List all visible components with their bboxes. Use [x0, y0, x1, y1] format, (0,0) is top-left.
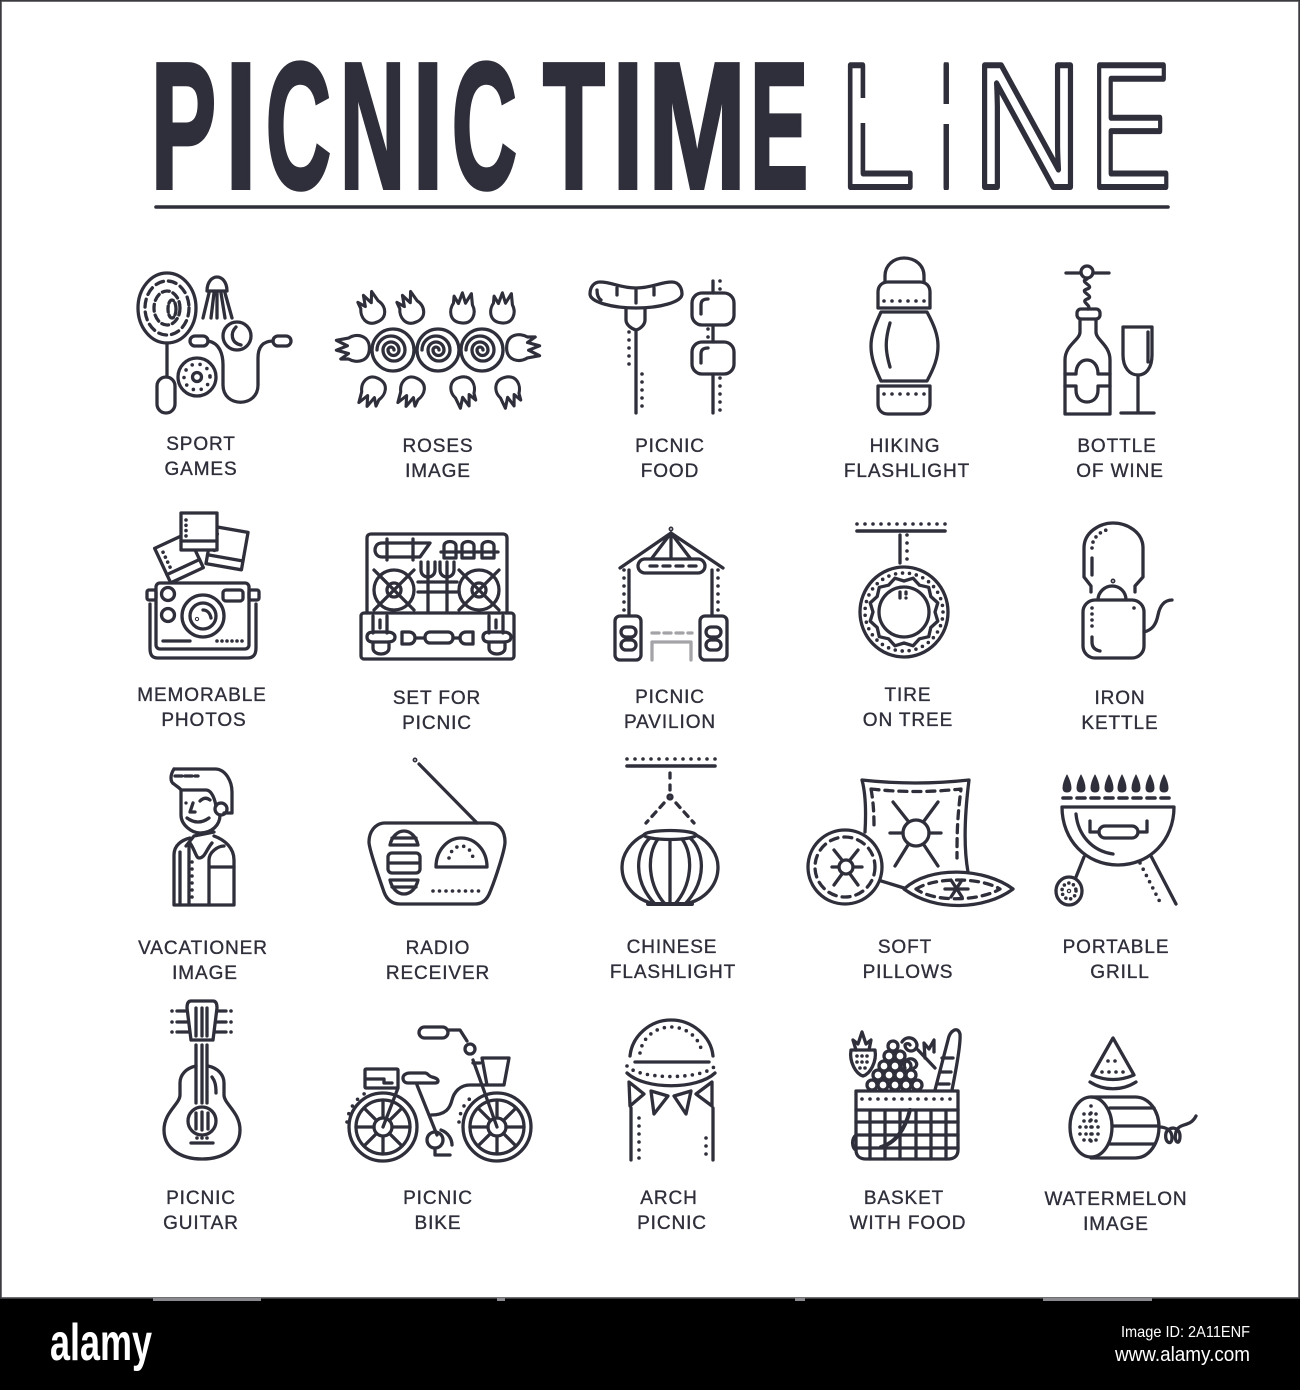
label: PICNIC [637, 1213, 707, 1234]
title: LINE: I [940, 27, 952, 225]
label: VACATIONER [138, 938, 268, 959]
label: PHOTOS [161, 710, 247, 731]
item: basket with food [850, 1030, 966, 1234]
label: ARCH [640, 1188, 698, 1209]
title underline [156, 205, 1168, 209]
label: SET FOR [393, 688, 481, 709]
icon: bottle, corkscrew and glass [1065, 266, 1154, 414]
label: WITH FOOD [850, 1213, 966, 1234]
item: soft pillows [808, 780, 1013, 983]
item: watermelon image [1044, 1038, 1196, 1235]
title: PICNIC TIME: T [543, 26, 605, 227]
item: arch picnic [627, 1020, 715, 1234]
icon: guitar [164, 1001, 240, 1159]
title: E [750, 26, 808, 227]
item: iron kettle [1081, 523, 1172, 734]
icon: man [171, 769, 234, 905]
icon: pavilion with table [615, 528, 727, 660]
label: OF WINE [1076, 461, 1164, 482]
icon: three pillows [808, 780, 1013, 906]
icon: flashlight [871, 258, 938, 414]
label: PICNIC [635, 436, 705, 457]
label: BIKE [415, 1213, 461, 1234]
icon: arch with bunting [627, 1020, 715, 1160]
label: KETTLE [1081, 713, 1159, 734]
item: bottle of wine [1065, 266, 1164, 482]
title: LINE: E [1089, 27, 1172, 225]
website: www.alamy.com [1114, 1344, 1250, 1366]
label: FOOD [641, 461, 699, 482]
icon: racket, shuttlecock, ball and skipping rope [138, 273, 291, 413]
label: CHINESE [627, 937, 717, 958]
label: ON TREE [863, 710, 953, 731]
item: portable grill [1056, 775, 1176, 983]
item: picnic pavilion [615, 528, 727, 733]
label: HIKING [870, 436, 940, 457]
title: PICNIC TIME: P [151, 26, 216, 227]
item: picnic food [590, 281, 734, 482]
label: PAVILION [624, 712, 716, 733]
icon: paper lantern [622, 759, 718, 904]
label: IRON [1094, 688, 1146, 709]
label: PICNIC [166, 1188, 236, 1209]
title: PICNIC TIME: I [612, 26, 644, 227]
label: MEMORABLE [137, 685, 267, 706]
item: sport games [138, 273, 291, 480]
item: radio receiver [369, 759, 505, 984]
icon: tire swing [857, 524, 948, 657]
label: IMAGE [172, 963, 238, 984]
label: SOFT [878, 937, 932, 958]
icon: basket with fruit and bread [851, 1030, 960, 1159]
title [151, 26, 1172, 227]
label: BASKET [864, 1188, 944, 1209]
icon: open picnic case [361, 534, 514, 659]
item: picnic bike [347, 1027, 531, 1234]
label: FLASHLIGHT [844, 461, 970, 482]
label: GAMES [164, 459, 238, 480]
footer logo: alamy [50, 1314, 152, 1372]
label: FLASHLIGHT [610, 962, 736, 983]
icon: watermelon and slice [1070, 1038, 1196, 1158]
icon: kettle [1083, 523, 1172, 658]
label: ROSES [402, 436, 474, 457]
title: PICNIC TIME: M [648, 26, 746, 227]
label: TIRE [885, 685, 931, 706]
label: PORTABLE [1063, 937, 1169, 958]
title: LINE: L [839, 27, 915, 225]
item: hiking flashlight [844, 258, 970, 482]
image id: Image ID: 2A11ENF [1121, 1324, 1250, 1341]
icon: sausage and marshmallow skewers [590, 281, 734, 413]
title: PICNIC TIME: C [452, 26, 517, 227]
footer bar [50, 1314, 1250, 1372]
title: PICNIC TIME: I [225, 26, 257, 227]
label: GUITAR [163, 1213, 239, 1234]
label: IMAGE [1083, 1214, 1149, 1235]
item: chinese flashlight [610, 759, 736, 983]
icon: bicycle with basket [347, 1027, 531, 1161]
icon: grill with flames [1056, 775, 1176, 905]
item: vacationer image [138, 769, 268, 984]
title: PICNIC TIME: C [266, 26, 331, 227]
label: PICNIC [402, 713, 472, 734]
icon: camera and photos [147, 513, 259, 658]
item: tire on tree [857, 524, 953, 731]
label: PICNIC [635, 687, 705, 708]
label: IMAGE [405, 461, 471, 482]
label: SPORT [166, 434, 236, 455]
item: memorable photos [137, 513, 267, 731]
title: PICNIC TIME: I [412, 26, 444, 227]
icon: three roses with leaves [336, 290, 540, 411]
title: LINE: N [972, 27, 1083, 225]
item: set for picnic [361, 534, 514, 734]
title: PICNIC TIME: N [340, 26, 405, 227]
label: RADIO [406, 938, 470, 959]
label: WATERMELON [1044, 1189, 1188, 1210]
icon: radio [369, 759, 505, 904]
label: GRILL [1090, 962, 1150, 983]
label: RECEIVER [386, 963, 490, 984]
label: PILLOWS [863, 962, 953, 983]
item: picnic guitar [163, 1001, 240, 1234]
label: PICNIC [403, 1188, 473, 1209]
label: BOTTLE [1077, 436, 1157, 457]
item: roses image [336, 290, 540, 482]
